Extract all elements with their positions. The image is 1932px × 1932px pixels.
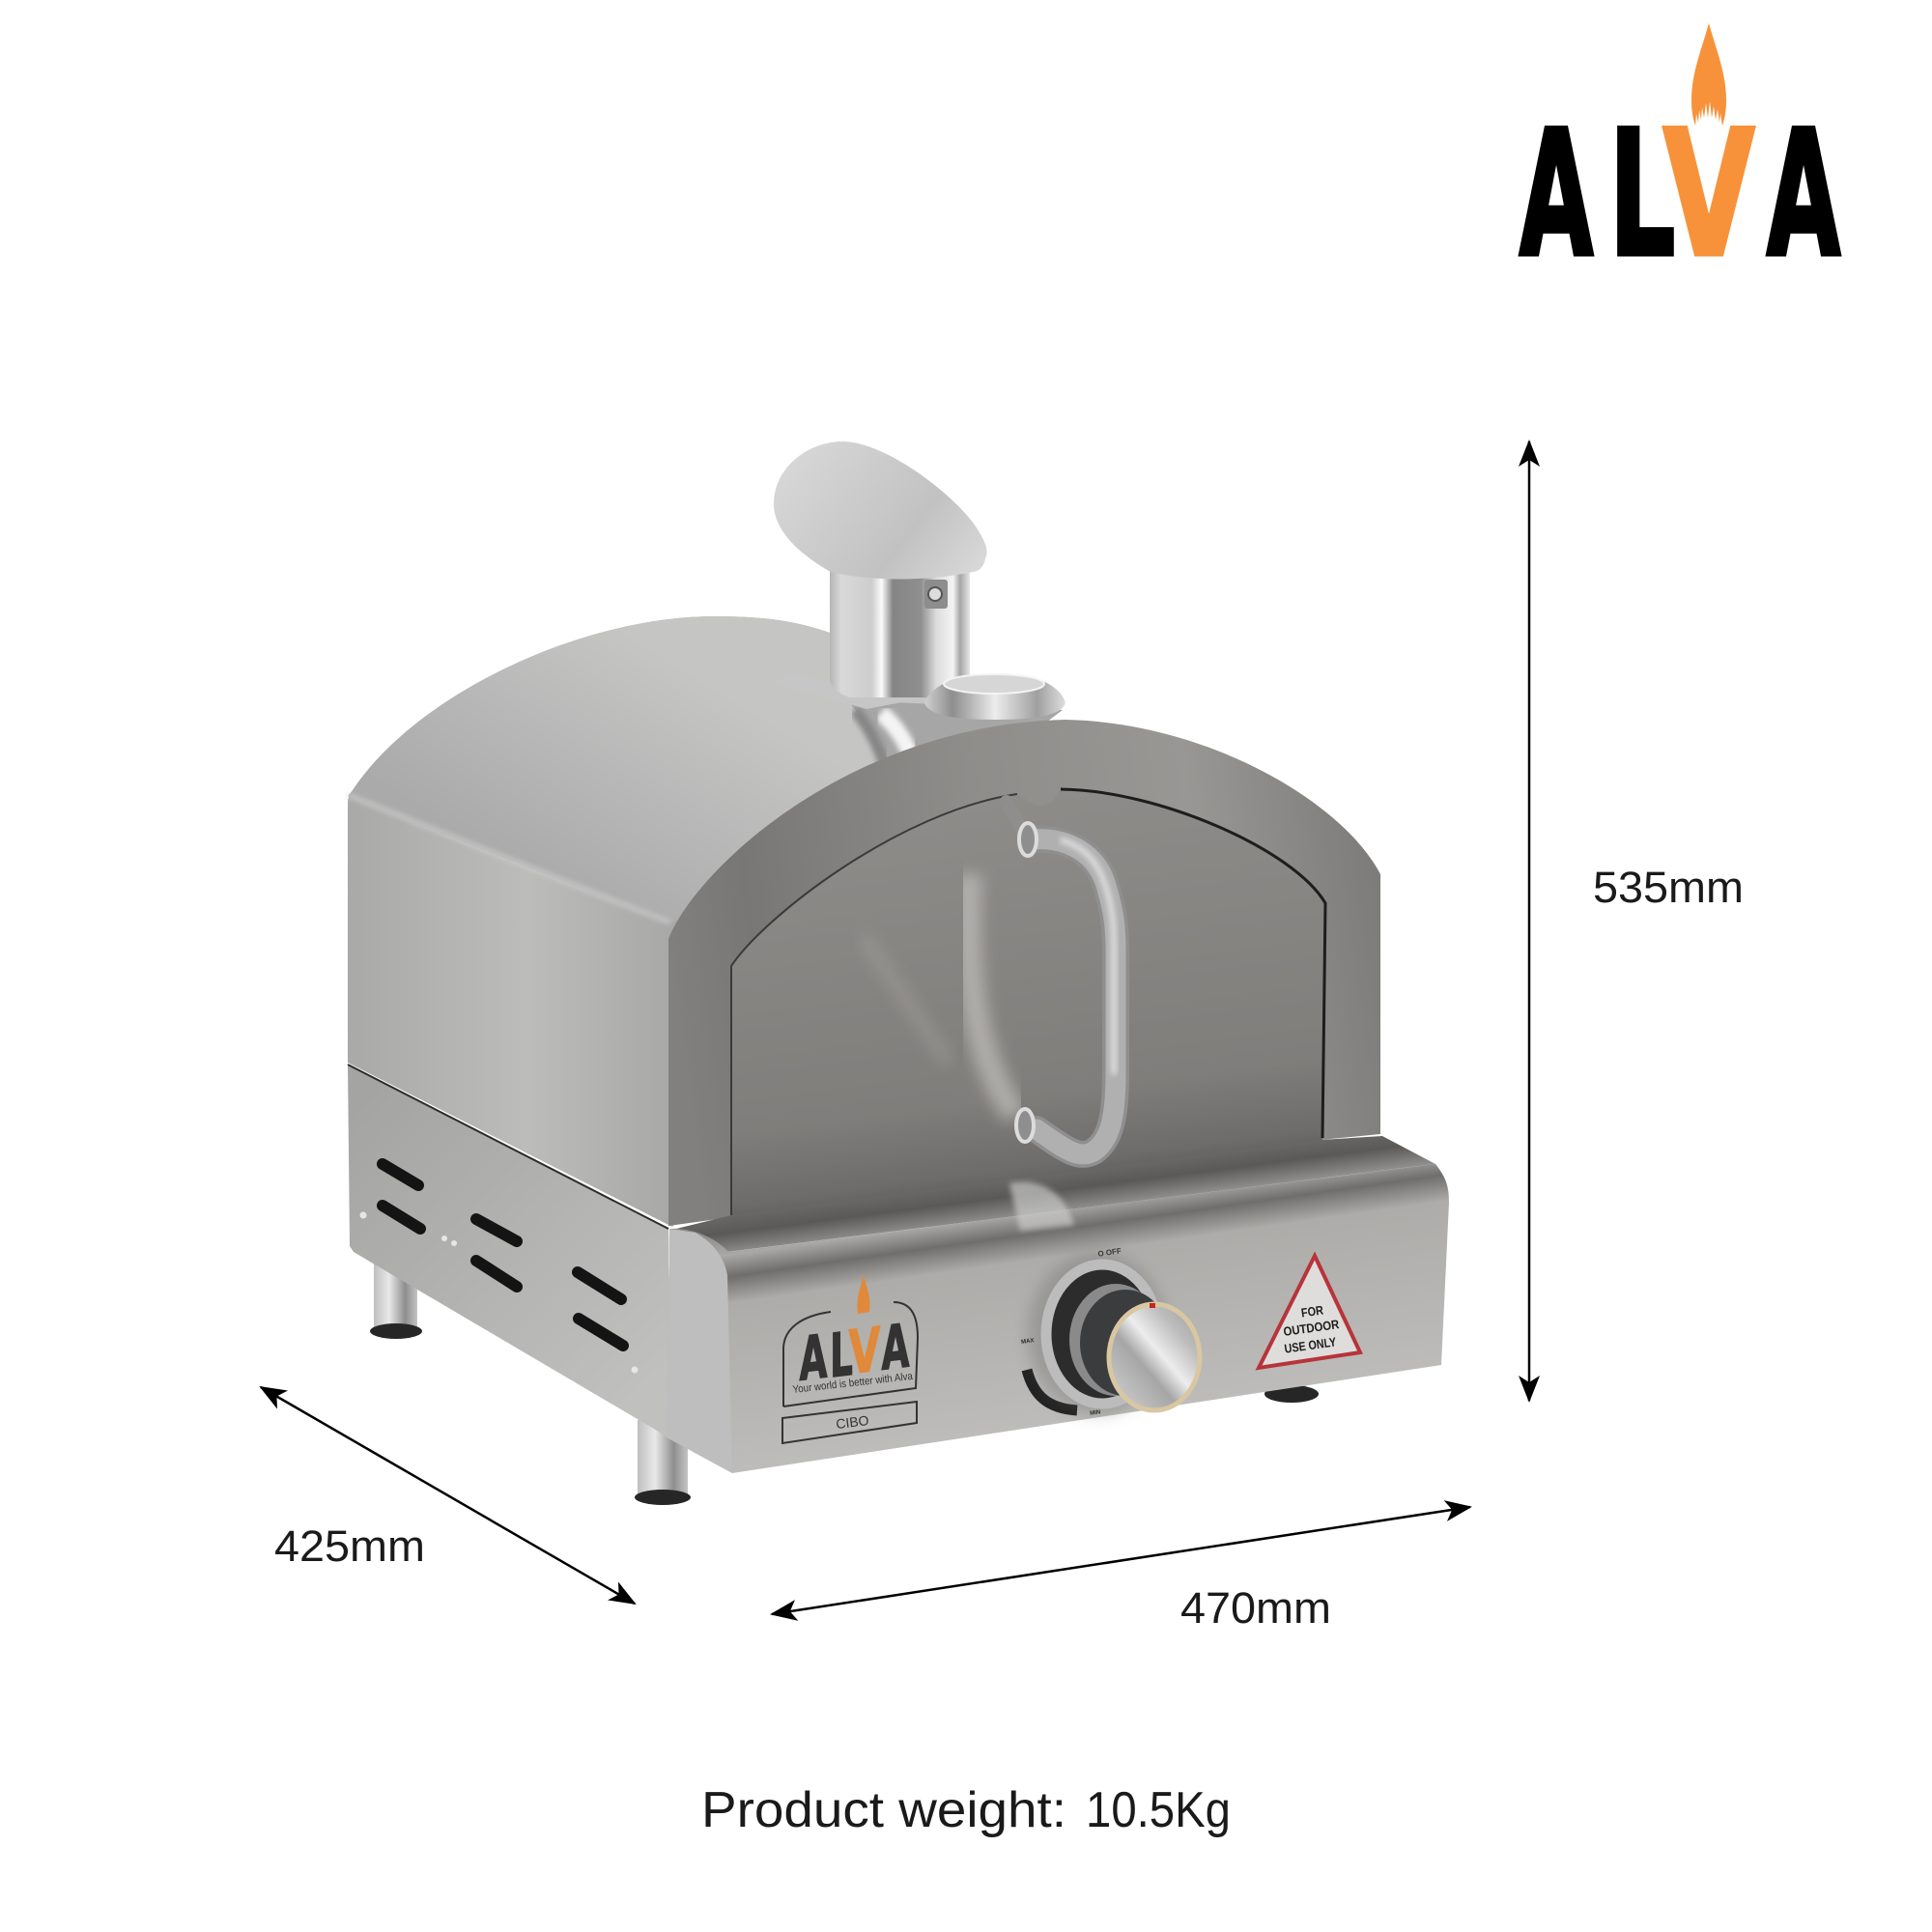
temperature gauge [924, 674, 1065, 720]
control panel [667, 1164, 1449, 1473]
door handle [1007, 802, 1116, 1154]
product weight caption: Product weight: [701, 1782, 1066, 1838]
small engraved logo: A [800, 1321, 828, 1396]
flue pipe bend [850, 700, 1063, 768]
logo flame [1691, 23, 1726, 127]
outdoor warning triangle [1259, 1256, 1360, 1368]
logo: ALVA brand mark [1520, 23, 1840, 296]
chimney [830, 570, 970, 697]
logo letters [1520, 94, 1840, 296]
product weight caption [701, 1782, 1231, 1838]
outdoor warning triangle: FOR [1300, 1302, 1324, 1321]
arrow: height dimension [1528, 441, 1530, 1401]
gas control knob [1021, 1246, 1200, 1417]
oven door [731, 789, 1325, 1219]
arrow: depth dimension [261, 1387, 635, 1604]
product weight caption: 10.5Kg [1086, 1782, 1231, 1838]
front bezel arch [668, 720, 1380, 1226]
control panel shelf [676, 1136, 1435, 1252]
rear right foot [1264, 1372, 1319, 1403]
small engraved logo: V [849, 1315, 880, 1388]
small engraved logo: Your world is better with Alva [792, 1371, 914, 1396]
label: depth: 425mm [274, 1521, 425, 1571]
logo letters: L [1609, 94, 1675, 295]
rear left leg [370, 1256, 422, 1339]
gas control knob: MAX [1021, 1338, 1035, 1346]
small engraved logo: L [830, 1320, 853, 1392]
screws [359, 1211, 638, 1374]
chimney cap [774, 441, 987, 580]
chimney mounting plate [773, 674, 927, 709]
arrow: width dimension [772, 1507, 1470, 1614]
label: width: 470mm [1180, 1583, 1331, 1633]
oven dome side [348, 616, 1063, 1227]
lower side box with vent slots [348, 1065, 668, 1437]
small engraved logo: CIBO [835, 1412, 869, 1432]
gas control knob: MIN [1090, 1409, 1101, 1417]
chimney bracket and screw [924, 580, 948, 609]
small engraved logo [782, 1275, 918, 1443]
door reflection [968, 874, 1016, 1116]
outdoor warning triangle: OUTDOOR [1283, 1317, 1341, 1339]
small engraved logo: A [882, 1311, 910, 1385]
logo letters: A [1520, 95, 1593, 296]
gas control knob: O OFF [1097, 1246, 1122, 1259]
front left leg [635, 1420, 691, 1505]
shelf reflection [1009, 1182, 1074, 1231]
door seam [1061, 789, 1325, 1138]
outdoor warning triangle: USE ONLY [1284, 1334, 1337, 1356]
label: height: 535mm [1593, 863, 1744, 912]
vent slots [383, 1164, 623, 1346]
oven product illustration [348, 441, 1449, 1505]
logo letters: A [1767, 95, 1840, 296]
handle mounts [1019, 823, 1037, 856]
logo letters: V [1663, 95, 1754, 296]
door left seam [731, 794, 1017, 1215]
